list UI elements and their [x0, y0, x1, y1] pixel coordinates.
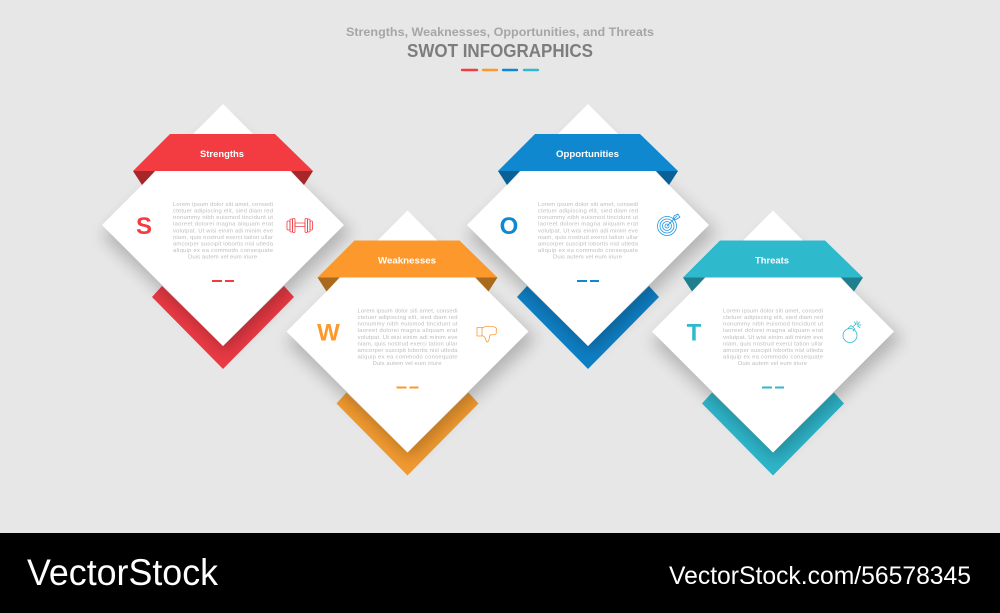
body text: laoreet dolorei magna aliquam erat [173, 222, 273, 228]
panel: weaknesses [286, 210, 536, 476]
body text: laoreet dolorei magna aliquam erat [723, 328, 823, 334]
body text: amcorper suscipit lobortis nisl utleda [173, 241, 274, 247]
dashes [762, 386, 784, 388]
body text: Lorem ipsum dolor siti amet, consedi [173, 202, 273, 208]
heading: Opportunities [556, 149, 619, 160]
letter: O [500, 213, 518, 240]
body text: amcorper suscipit lobortis nisl utleda [723, 348, 824, 354]
body text [723, 308, 824, 367]
ribbon [683, 240, 863, 278]
body text: Lorem ipsum dolor siti amet, consedi [358, 308, 458, 314]
ribbon [133, 134, 313, 171]
subtitle: Strengths, Weaknesses, Opportunities, and Threats [346, 25, 654, 39]
body text: niam, quis nostrud exerci tation ullar [723, 341, 823, 347]
body text [538, 202, 639, 261]
bottom ribbon [702, 392, 844, 476]
footer url: VectorStock.com/56578345 [669, 562, 971, 590]
card shadow [652, 226, 902, 458]
body text: nonummy nibh euismod tincidunt ut [723, 322, 823, 328]
body text: volutpat. Ut wisi einim adi minim eve [358, 335, 458, 341]
icon: dumbbell [287, 218, 312, 232]
icon: bomb [843, 321, 861, 342]
body text: niam, quis nostrud exerci tation ullar [358, 341, 458, 347]
ribbon [318, 240, 498, 278]
bottom ribbon [152, 286, 294, 369]
heading: Strengths [200, 149, 244, 160]
letter: S [136, 213, 152, 240]
ribbon folds [498, 171, 678, 185]
footer bar [0, 533, 1000, 613]
footer logo: VectorStock [27, 552, 218, 593]
body text: volutpat. Ut wisi einim adi minim eve [723, 335, 824, 341]
bottom ribbon [517, 286, 659, 369]
body text [358, 308, 458, 367]
ribbon folds [318, 278, 498, 292]
body text: nonummy nibh euismod tincidunt ut [538, 215, 638, 221]
letter: T [687, 320, 702, 346]
body text: aliquip ex ea commodo consequate [173, 248, 274, 254]
body text: niam, quis nostrud exerci tation ullar [173, 235, 273, 241]
card shadow [467, 120, 717, 352]
body text: niam, quis nostrud exerci tation ullar [538, 235, 638, 241]
title accent dashes [462, 69, 538, 71]
diamond card [286, 210, 528, 452]
panel: threats [652, 210, 902, 476]
body text: Duis autem vel eum iriure [188, 255, 258, 261]
dashes [212, 280, 234, 282]
body text: aliquip ex ea commodo consequate [358, 354, 458, 360]
body text: ctetuer adipiscing elit, sied diam red [723, 315, 823, 321]
body text: aliquip ex ea commodo consequate [723, 354, 824, 360]
body text: ctetuer adipiscing elit, sied diam red [538, 209, 638, 215]
dashes [396, 386, 418, 388]
body text [173, 202, 274, 261]
dashes [577, 280, 599, 282]
body text: laoreet dolorei magna aliquam erat [538, 222, 638, 228]
body text: aliquip ex ea commodo consequate [538, 248, 639, 254]
diamond card [467, 104, 709, 346]
body text: ctetuer adipiscing elit, sied diam red [173, 209, 273, 215]
card shadow [102, 120, 352, 352]
ribbon folds [683, 278, 863, 292]
icon: target [658, 214, 680, 236]
body text: volutpat. Ut wisi einim adi minim eve [538, 228, 639, 234]
body text: amcorper suscipit lobortis nisl utleda [358, 348, 458, 354]
body text: laoreet dolorei magna aliquam erat [358, 328, 458, 334]
bottom ribbon [336, 392, 478, 476]
body text: Duis autem vel eum iriure [372, 361, 442, 367]
heading: Weaknesses [378, 256, 436, 266]
body text: Lorem ipsum dolor siti amet, consedi [723, 308, 823, 314]
icon: thumbs down [477, 326, 496, 342]
body text: Duis autem vel eum iriure [553, 255, 623, 261]
body text: nonummy nibh euismod tincidunt ut [173, 215, 273, 221]
title: SWOT INFOGRAPHICS [407, 40, 593, 61]
panel: strengths [102, 104, 352, 369]
body text: Duis autem vel eum iriure [738, 361, 808, 367]
body text: amcorper suscipit lobortis nisl utleda [538, 241, 639, 247]
body text: Lorem ipsum dolor siti amet, consedi [538, 202, 638, 208]
letter: W [317, 320, 340, 346]
panel: opportunities [467, 104, 717, 369]
diamond card [652, 210, 894, 452]
body text: volutpat. Ut wisi einim adi minim eve [173, 228, 274, 234]
ribbon folds [133, 171, 313, 185]
ribbon [498, 134, 678, 171]
diamond card [102, 104, 344, 346]
body text: nonummy nibh euismod tincidunt ut [358, 322, 458, 328]
body text: ctetuer adipiscing elit, sied diam red [358, 315, 458, 321]
heading: Threats [755, 256, 789, 266]
card shadow [286, 226, 536, 458]
